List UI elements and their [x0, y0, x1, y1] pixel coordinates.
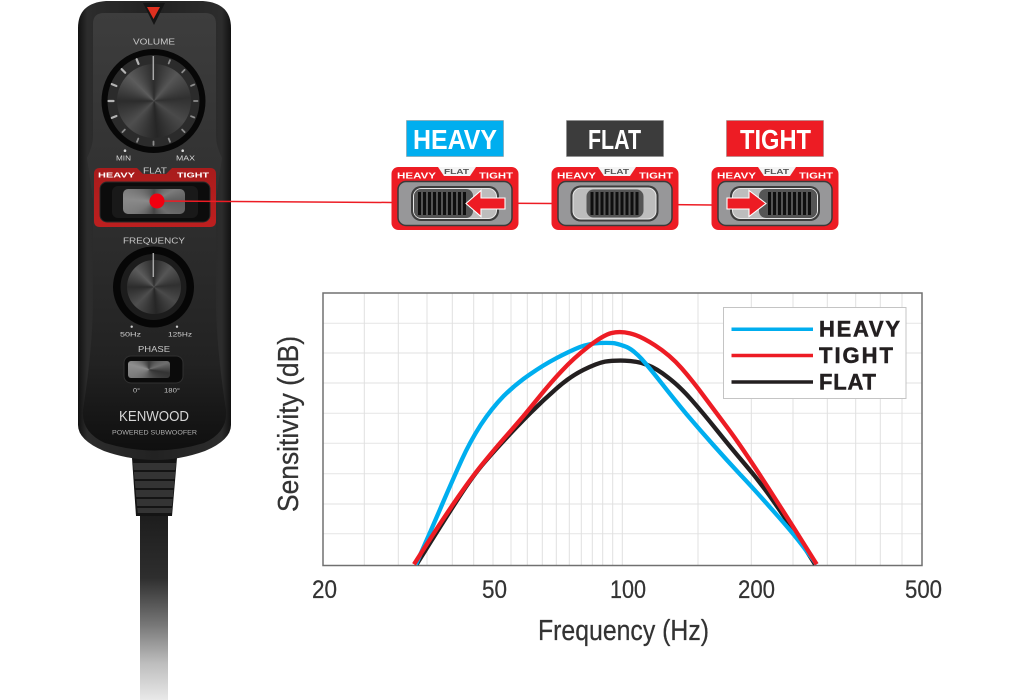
switch: heavy position: FLAT	[444, 167, 470, 176]
curve: tight	[414, 332, 817, 564]
heavy mode	[392, 120, 518, 230]
device shell	[78, 1, 231, 460]
label: frequency: FREQUENCY	[123, 236, 186, 246]
frequency pointer	[152, 253, 154, 277]
mode selector slider	[123, 189, 185, 214]
frequency knob ring	[113, 246, 194, 328]
top indicator triangle	[143, 3, 165, 25]
heading: heavy: HEAVY	[413, 124, 497, 155]
selector labels: HEAVY	[98, 170, 135, 180]
mode selector housing	[94, 168, 216, 227]
chart legend: HEAVY	[819, 316, 900, 342]
switch: flat position: FLAT	[604, 167, 630, 176]
volume pointer	[152, 56, 154, 80]
selector labels	[98, 166, 210, 180]
frequency knob cap	[126, 260, 180, 314]
label: phase: PHASE	[138, 345, 170, 354]
phase markings: 180°	[164, 386, 180, 394]
chart legend: TIGHT	[819, 343, 894, 368]
strain relief	[132, 458, 177, 516]
switch: flat position	[552, 167, 678, 230]
chart legend: FLAT	[819, 370, 877, 394]
x axis labels: 500	[905, 576, 942, 604]
frequency response chart	[323, 293, 922, 566]
tight mode	[712, 120, 838, 230]
frequency range markers: 125Hz	[168, 332, 192, 338]
phase switch slider	[128, 361, 170, 378]
volume range markers	[116, 149, 195, 162]
connector line	[150, 194, 712, 208]
curve: heavy	[416, 343, 817, 564]
frequency range markers: 50Hz	[120, 332, 141, 338]
switch: heavy position	[392, 167, 518, 230]
phase markings: 0°	[133, 386, 140, 394]
volume range markers: MAX	[176, 156, 195, 162]
switch: heavy position: HEAVY	[397, 172, 437, 180]
brand name: KENWOOD	[119, 408, 189, 425]
volume knob cap	[116, 64, 190, 138]
selector labels: TIGHT	[177, 170, 210, 180]
heading: tight: TIGHT	[740, 124, 811, 155]
x axis labels	[312, 576, 942, 604]
switch: heavy position: TIGHT	[479, 172, 513, 180]
switch: tight position: FLAT	[764, 167, 790, 176]
flat mode	[552, 120, 678, 230]
switch: flat position: HEAVY	[557, 172, 597, 180]
x axis labels: 100	[610, 576, 646, 604]
volume ticks	[108, 59, 198, 145]
x axis labels: 50	[482, 576, 507, 604]
x axis title: Frequency (Hz)	[538, 615, 709, 647]
selector labels: FLAT	[143, 166, 167, 176]
device labels	[98, 38, 210, 436]
volume range markers: MIN	[116, 156, 131, 162]
switch: tight position: TIGHT	[799, 172, 833, 180]
x axis labels: 20	[312, 576, 337, 604]
switch: flat position: TIGHT	[639, 172, 673, 180]
frequency range markers	[120, 326, 192, 338]
product name: POWERED SUBWOOFER	[112, 430, 197, 436]
phase markings	[133, 386, 180, 394]
device body and cable	[78, 1, 231, 700]
volume knob ring	[102, 49, 206, 153]
chart legend	[724, 308, 906, 398]
switch: tight position	[712, 167, 838, 230]
remote control device	[78, 1, 231, 700]
heading: flat: FLAT	[588, 124, 641, 155]
switch: tight position: HEAVY	[717, 172, 757, 180]
cable	[140, 512, 168, 700]
x axis labels: 200	[738, 576, 775, 604]
phase switch slot	[124, 356, 183, 383]
face panel	[83, 13, 226, 450]
y axis title: Sensitivity (dB)	[273, 336, 305, 512]
curve: flat	[417, 361, 815, 564]
label: volume: VOLUME	[133, 38, 175, 46]
